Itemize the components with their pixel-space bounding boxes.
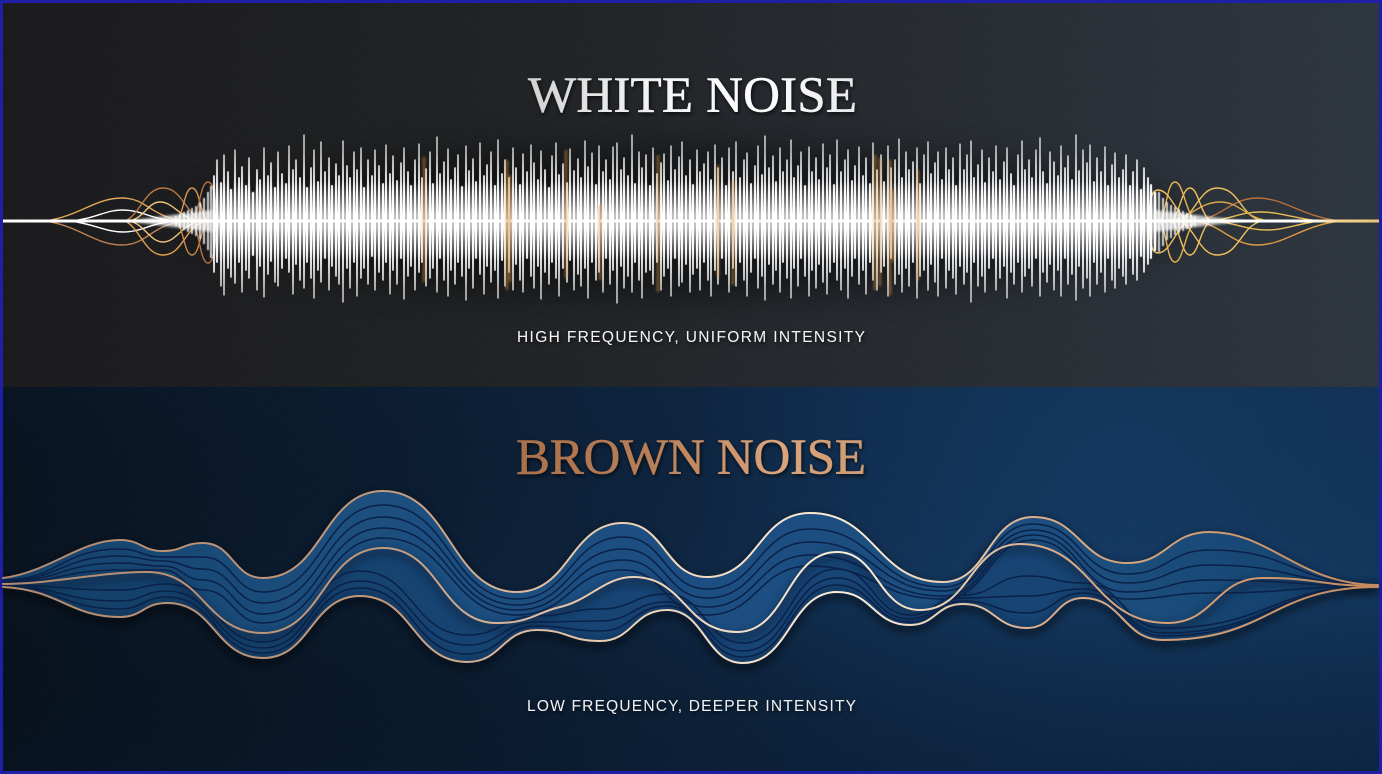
icon: amber tinted spikes (424, 150, 918, 295)
panel: brown noise (3, 387, 1379, 771)
icon: tapered core at the ends (125, 210, 1245, 232)
icon: white noise spikes (214, 135, 1155, 303)
caption: white noise: HIGH FREQUENCY, UNIFORM INTENSITY (517, 329, 865, 346)
title: brown noise: BROWN NOISE (516, 430, 866, 486)
panel: white noise (3, 3, 1379, 387)
chart: white noise waveform (3, 135, 1379, 303)
title: white noise: WHITE NOISE (528, 68, 857, 124)
chart: brown noise waveform (0, 490, 1382, 672)
icon: horizontal axis line (3, 220, 1379, 222)
icon: bright waveform centre band (165, 216, 1200, 226)
icon: side spikes fading out (176, 186, 1195, 258)
icon: right gold filaments (1148, 182, 1340, 262)
icon: ribbon upper band (3, 492, 1372, 662)
icon: ribbon inner contour lines (3, 505, 1378, 657)
caption: brown noise: LOW FREQUENCY, DEEPER INTENSITY (527, 698, 856, 715)
icon: left gold filaments (45, 182, 220, 263)
icon: copper outline curves (3, 491, 1378, 663)
icon: ribbon drop shadow (3, 495, 1378, 667)
